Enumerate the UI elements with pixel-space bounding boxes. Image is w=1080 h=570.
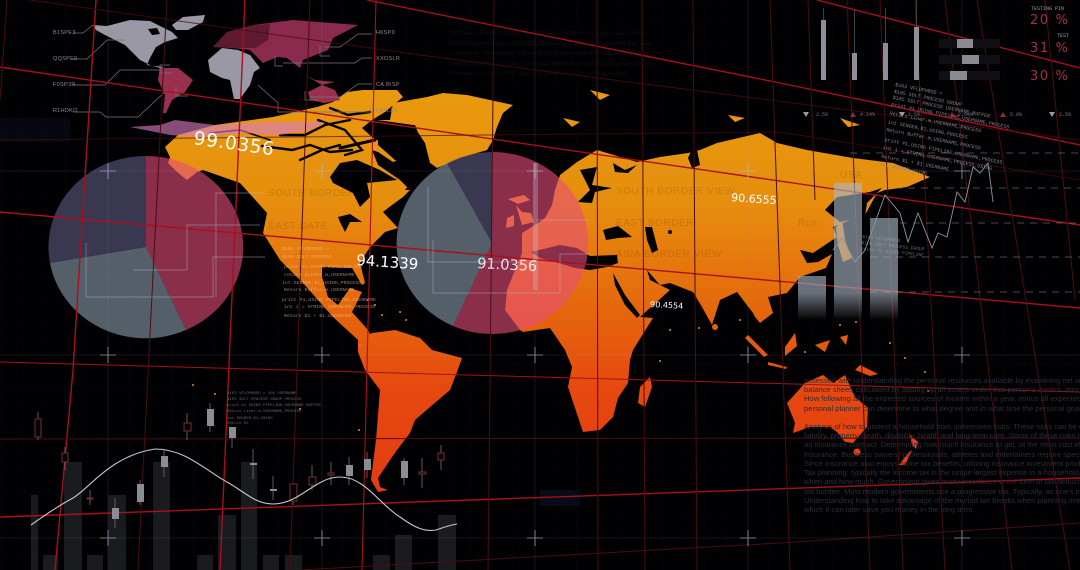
dashed level lines [850,153,1080,292]
percentage readouts: 31 % [1030,41,1069,56]
leader labels: B1SPE3 [53,30,76,36]
mini world map with leader labels [53,15,400,137]
code text near bars: $105 SDLT PROCESS GROUP [861,240,925,253]
large world map [165,90,930,492]
percentage readouts: TESTING PIN [1031,6,1064,12]
hollow red candles [35,419,444,501]
mini map: South America, Eurasia, Australia [158,20,358,113]
top vertical bars [821,0,919,80]
percentage readouts: TEST [1057,33,1069,39]
map land: islands [506,90,918,465]
value: 91.0356: 91.0356 [477,256,538,275]
map land: Eurasia and Africa [505,133,930,432]
faded map labels: EAST BORDER [616,218,694,229]
map land: South America [358,330,462,492]
faded map labels: Rus [798,218,818,229]
code text on Central America: return $Liner,m,USERNAME [284,272,355,278]
code text near bars: print #1 USING PIPELINE [861,246,924,259]
leader labels: XXOSLR [376,56,400,62]
value: 90.6555: 90.6555 [731,191,777,207]
paragraph text lower right [803,376,1080,514]
trend curve lower left [31,449,457,530]
dim background text block: Consumer confidence, industrial production and interest rate changes [450,50,651,57]
code text upper right: int SENDER,$1,USING,PROCESS [887,119,968,141]
dim background text block: Currency reserves, commodity flows and trade balances over the year [450,40,652,47]
dark column bars, lower left [31,462,456,570]
percentage readouts: 30 % [1030,69,1069,84]
map holes: bays, seas and channels [330,125,882,318]
code text lower centre: Return $1 [227,421,249,426]
leader labels: H6SP9 [376,30,395,36]
code text on Central America: int SENDER,$1,USING,PROCESS [282,280,361,286]
faded map labels: ASIA BORDER VIEW [616,249,722,260]
pie chart centre [397,152,588,334]
faded map labels [268,170,862,260]
filled candles [112,409,408,519]
leader labels: F0SP3R [53,82,76,88]
code text lower centre: $103 VFLDPHBSD = 105 USERNAME [227,391,297,396]
code text on Central America: $103 VFlDPHBSD = [282,246,329,252]
code text on Central America [282,246,376,319]
leader lines [73,25,372,117]
indicator triangles row: 5.0% [1010,112,1022,118]
leader labels: CA.BISP [376,82,400,88]
indicator triangles row: 2.5% [908,112,920,118]
mini map: Antarctica [130,120,325,137]
leader labels: R1HDKO [53,108,78,114]
value: 99.0356: 99.0356 [192,128,276,160]
code text on Central America: Return $1 + $1 USERNAME [284,313,352,319]
code text lower centre: int SENDER,$1,USING [227,416,273,421]
dim background text block: Forecast revisions and quarterly results for the coming period [450,70,627,77]
mini map: Americas and Africa [93,15,260,99]
code text lower centre: print #1 USING PIPELINE,USERNAME BUFFER [227,403,321,408]
indicator triangles row: 7.54% [958,112,973,118]
code text on Central America: int i = STRING,USERNAME,PROCESS [284,304,375,310]
code text upper right: Return $1 + $1 USERNAME [881,154,950,173]
dim background text block [450,30,652,77]
percentage readouts: 20 % [1030,13,1069,28]
leader labels [53,30,400,114]
pie highlight strip [533,163,538,290]
indicator triangles row: 2.5% [816,112,828,118]
code text lower centre: Return Liner.m,USERNAME,PROCESS [227,409,302,414]
candlestick chart lower left [35,403,444,528]
code text near bars: $103 VFLDPHBSD [862,234,901,244]
percentage readouts [1030,6,1069,84]
leader labels: QQSPE0 [53,56,77,62]
code text upper right: int SENDER,USING [879,162,927,177]
bar chart right [798,183,898,320]
code text upper right: $103 VFLDPHBSD = [895,82,943,97]
pie chart left [48,156,243,338]
code text upper right [879,82,1014,190]
pie frame callout lines [86,187,590,297]
zigzag line chart [833,163,993,262]
code text upper right: $105 SDLT PROCESS USERNAME BUFFER [892,95,990,120]
code text on Central America: print #1 USING PIPELINE.MLT [284,264,363,270]
value: 94.1339: 94.1339 [356,251,419,273]
indicator triangles row: 4.14% [860,112,875,118]
map dots: scattered islands [192,299,929,431]
code text upper right: print #1,USING PIPELINE,USERNAME,PROCESS [884,137,1003,166]
candle wicks [38,403,441,528]
code text lower centre: $105 SDLT PROCESS GROUP,PROCESS [227,397,302,402]
horizontal range bars [939,39,1000,80]
code text upper right: $105 SDLT PROCESS GROUP [893,89,962,108]
indicator triangles row: 2.5% [1059,112,1071,118]
code text on Central America: $105 SDLT PROCE55 [282,254,332,260]
dim background text block: Equity indices and bond yields compared across emerging economies [450,60,652,67]
code text lower centre [227,391,321,426]
map land: Greenland [377,93,513,168]
indicator triangles row [803,112,1071,118]
dim background text block: Global economic outlook and market indicators by region and sector [450,30,647,37]
faded map labels: SOUTH BORDER [268,188,356,199]
value: 90.4554: 90.4554 [650,300,683,311]
code text on Central America: Return Buffer.m,USERNAME [284,287,355,293]
paragraph text lower right: which it can later save you money in the long term. [803,505,975,514]
faded map labels: USA [840,170,862,181]
faded map labels: SOUTH BORDER VIEW [616,186,735,197]
code text upper right: Return Buffer.m,USERNAME,PROCESS [886,127,981,151]
code text near bars [861,234,926,259]
leader labels: F3SLBS [376,108,398,114]
code text upper right: print #1 USING PIPELINE,USERNAME,PROCESS [891,102,1010,130]
code text upper right: int i = STRING,USERNAME,PROCESS,USING [882,145,993,172]
faded map labels: EAST DATE [268,221,328,232]
map land: North America [165,90,410,340]
code text upper right: Return Liner.m,USERNAME,PROCESS [889,111,982,134]
code text on Central America: print #1,USING PIPELINE,USERNAME [282,297,376,303]
crosshair markers [100,163,970,546]
